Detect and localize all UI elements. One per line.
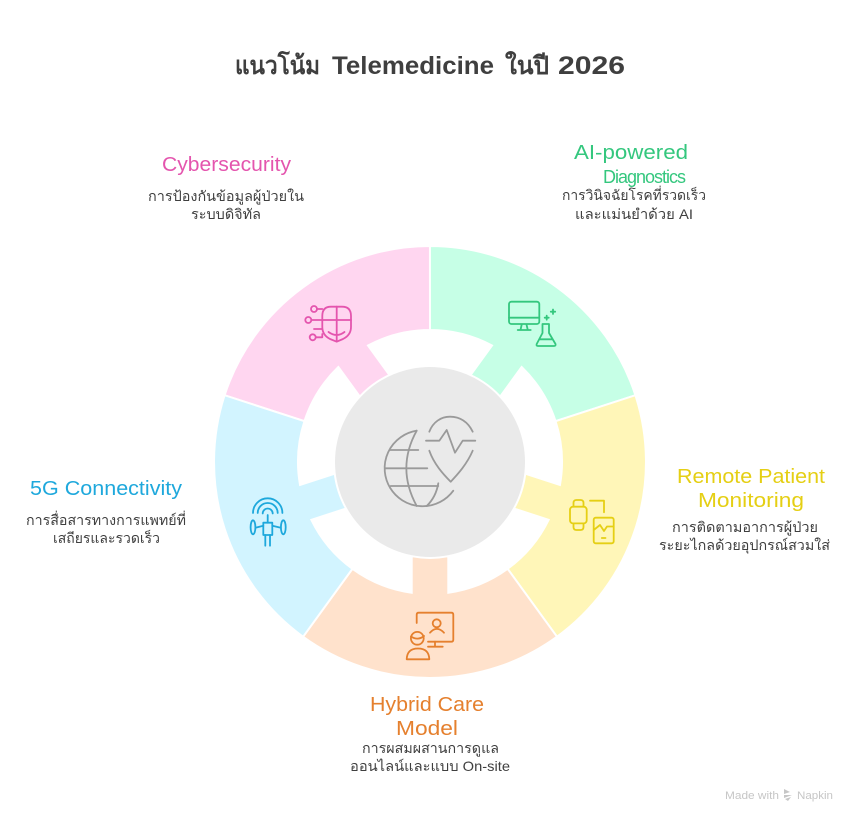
icon: globe with heartbeat pin bbox=[385, 417, 475, 506]
icon: doctor and patient on monitor bbox=[407, 613, 453, 659]
text: hybrid care description: การผสมผสานการดูแล bbox=[362, 740, 499, 757]
heading: AI-powered Diagnostics bbox=[574, 142, 688, 187]
center circle bbox=[335, 367, 525, 557]
icon: cyber shield circuit bbox=[305, 306, 351, 342]
footer: Made with Napkin: Napkin bbox=[797, 790, 833, 802]
heading: AI-powered Diagnostics: AI-powered bbox=[574, 142, 688, 164]
text: diagnostics description: และแม่นยำด้วย AI bbox=[575, 206, 693, 222]
panel: AI-powered diagnostics segment bbox=[383, 213, 660, 460]
title: Telemedicine bbox=[332, 52, 494, 80]
footer: Made with Napkin bbox=[725, 789, 833, 802]
panel: hybrid care model segment bbox=[303, 556, 557, 678]
icon: wearable watch and phone bbox=[570, 500, 614, 543]
title: ในปี bbox=[505, 50, 549, 80]
text: diagnostics description: การวินิจฉัยโรคที่รวดเร็ว bbox=[562, 186, 706, 203]
text: 5G description bbox=[26, 511, 186, 546]
text: remote monitoring description: ระยะไกลด้วยอุปกรณ์สวมใส่ bbox=[659, 537, 830, 554]
icon: monitor and flask bbox=[509, 302, 556, 346]
panel: 5G connectivity segment bbox=[185, 370, 380, 650]
footer: Made with Napkin: Made with bbox=[725, 790, 779, 802]
heading: Remote Patient Monitoring: Remote Patient bbox=[677, 466, 825, 488]
text: remote monitoring description bbox=[659, 519, 830, 554]
heading: Cybersecurity: Cybersecurity bbox=[162, 154, 291, 176]
icon: 5G antenna bbox=[251, 498, 286, 546]
text: diagnostics description bbox=[562, 186, 706, 222]
heading: 5G Connectivity: 5G Connectivity bbox=[30, 478, 182, 500]
panel: cybersecurity segment bbox=[200, 213, 477, 460]
heading: AI-powered Diagnostics: Diagnostics bbox=[603, 167, 686, 187]
text: 5G description: การสื่อสารทางการแพทย์ที่ bbox=[26, 511, 186, 528]
heading: Remote Patient Monitoring: Monitoring bbox=[698, 490, 804, 512]
text: hybrid care description bbox=[350, 740, 510, 774]
text: cybersecurity description: ระบบดิจิทัล bbox=[191, 206, 261, 222]
text: hybrid care description: ออนไลน์และแบบ On-site bbox=[350, 758, 510, 774]
heading: Hybrid Care Model: Hybrid Care bbox=[370, 694, 484, 716]
text: cybersecurity description bbox=[148, 188, 304, 222]
heading: Remote Patient Monitoring bbox=[677, 466, 825, 512]
title: แนวโน้ม bbox=[235, 50, 320, 80]
text: cybersecurity description: การป้องกันข้อมูลผู้ป่วยใน bbox=[148, 188, 304, 205]
heading: Hybrid Care Model: Model bbox=[396, 718, 458, 740]
heading: Hybrid Care Model bbox=[370, 694, 484, 740]
text: 5G description: เสถียรและรวดเร็ว bbox=[53, 529, 160, 546]
title: 2026 bbox=[558, 52, 625, 80]
text: remote monitoring description: การติดตามอาการผู้ป่วย bbox=[672, 519, 818, 536]
title bbox=[235, 50, 625, 80]
panel: remote patient monitoring segment bbox=[480, 370, 675, 650]
